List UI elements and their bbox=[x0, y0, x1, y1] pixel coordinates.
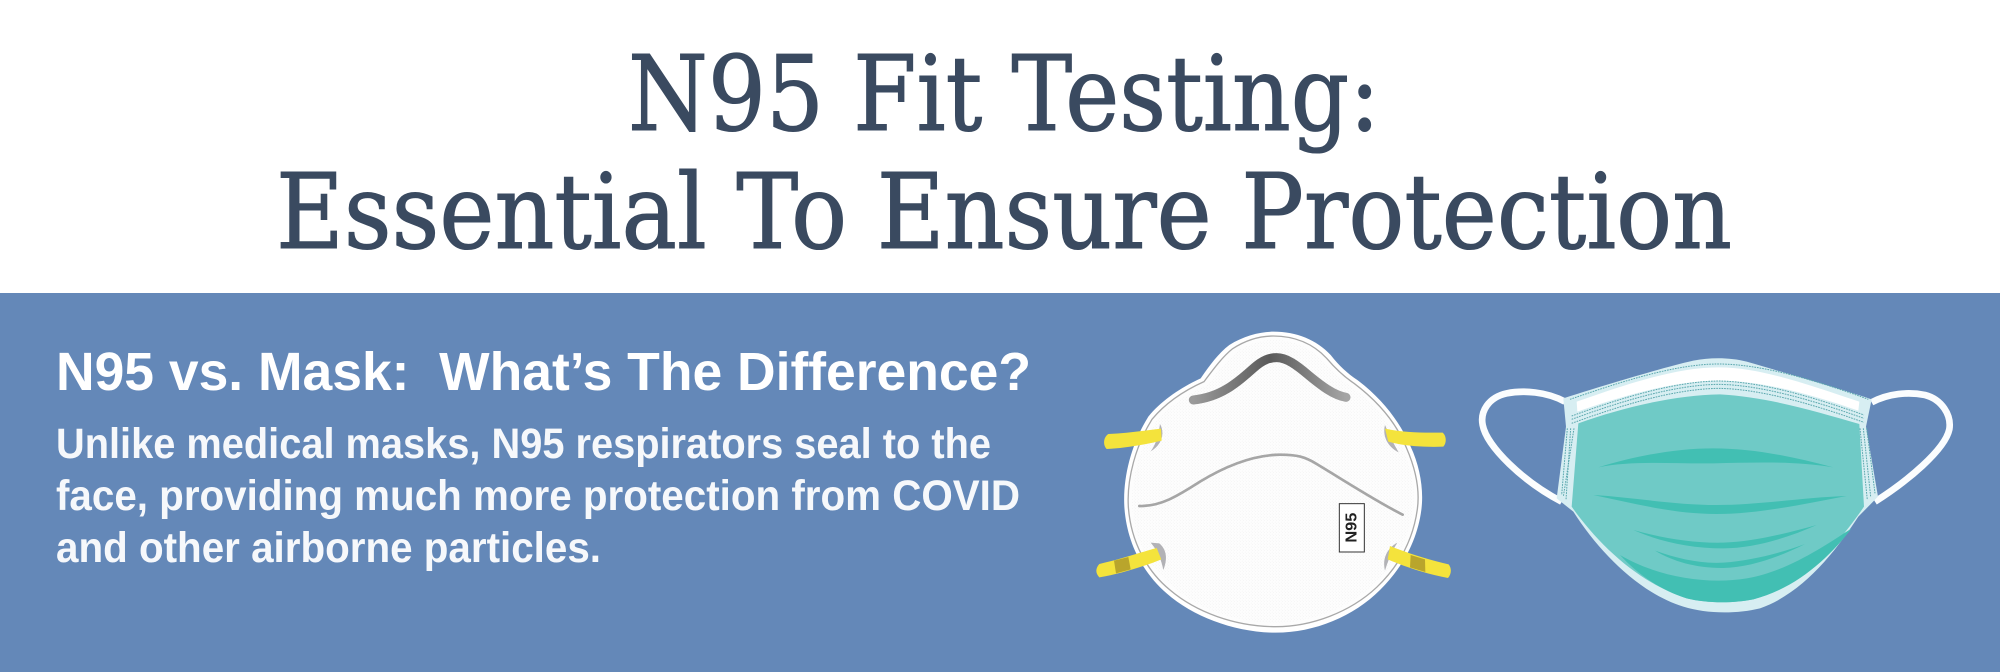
top white band bbox=[1577, 367, 1859, 412]
respirator body bbox=[1124, 332, 1422, 633]
panel: blue comparison band bbox=[0, 293, 2000, 672]
text block: explanation bbox=[56, 420, 1020, 572]
title: N95 Fit Testing: bbox=[628, 33, 1380, 155]
stitching bbox=[1562, 364, 1875, 500]
title: Essential To Ensure Protection bbox=[276, 151, 1732, 273]
text block: explanation: face, providing much more protection from COVID bbox=[56, 472, 1020, 520]
nose wire bbox=[1193, 358, 1346, 400]
fold line bbox=[1139, 455, 1403, 515]
mask fabric bbox=[1572, 394, 1864, 602]
icon: N95 respirator bbox=[1096, 332, 1451, 633]
N95 label: N95 bbox=[1344, 512, 1361, 543]
title bbox=[276, 33, 1732, 273]
N95 label bbox=[1339, 504, 1364, 552]
straps bbox=[1096, 424, 1451, 578]
text block: explanation: and other airborne particles. bbox=[56, 524, 601, 572]
ear loops bbox=[1482, 392, 1950, 502]
mask border bbox=[1557, 358, 1878, 612]
heading: N95 vs. Mask: N95 vs. Mask: What’s The Difference? bbox=[56, 342, 1031, 402]
icon: surgical mask bbox=[1482, 358, 1950, 612]
lower shade bbox=[1620, 528, 1852, 602]
text block: explanation: Unlike medical masks, N95 respirators seal to the bbox=[56, 420, 991, 468]
pleats bbox=[1593, 448, 1847, 568]
